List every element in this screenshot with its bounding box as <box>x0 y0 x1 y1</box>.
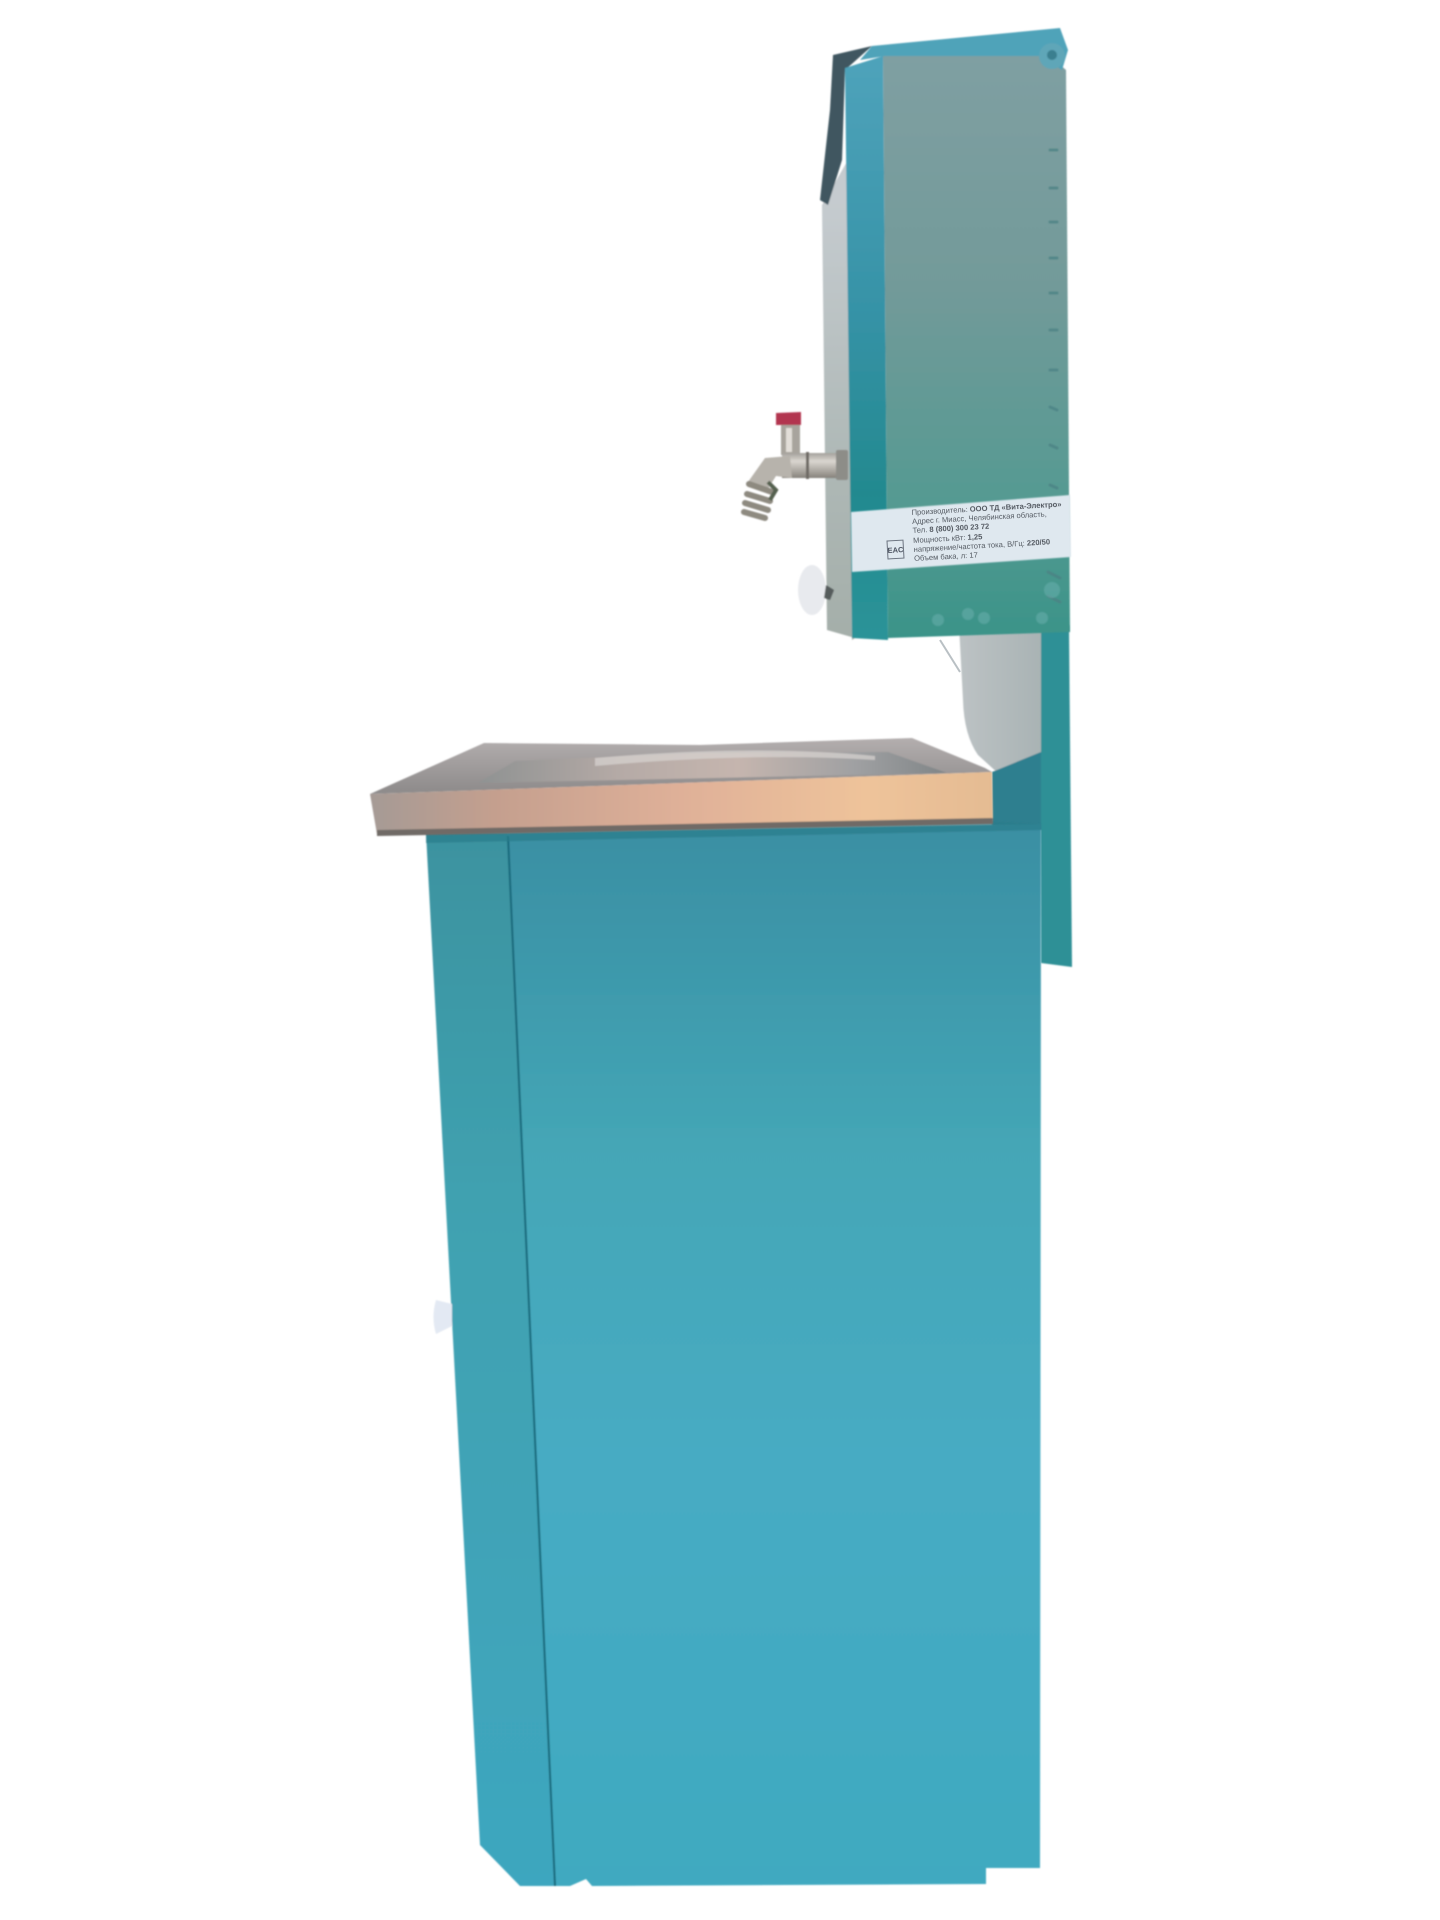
rear mounting panel <box>959 625 1072 967</box>
product label sticker <box>851 495 1071 572</box>
cabinet front door <box>508 824 1041 1886</box>
plug / thermostat cap <box>798 565 834 615</box>
sink top rim <box>370 738 992 794</box>
tap body <box>782 453 848 478</box>
stainless steel sink <box>370 738 993 836</box>
side handle knob <box>434 1300 452 1334</box>
hinge screw <box>1039 43 1065 69</box>
sink basin <box>478 752 947 783</box>
door seam <box>508 836 555 1886</box>
water heater tank <box>820 28 1070 640</box>
EAC mark: EAC <box>887 545 904 555</box>
tap stem <box>781 425 800 455</box>
water tap <box>744 412 848 518</box>
tank front panel <box>883 56 1070 638</box>
label text: Производитель: ООО ТД «Вита-Электро» <box>911 500 1062 517</box>
label text: Объем бака, л: 17 <box>914 550 978 563</box>
sink front edge <box>370 772 993 834</box>
cabinet side strip <box>426 833 555 1886</box>
tank top strip <box>860 28 1068 70</box>
tank grey side <box>822 160 855 640</box>
tap red handle <box>776 412 801 425</box>
shadow under sink <box>426 821 1041 843</box>
tank teal band <box>845 56 888 640</box>
label text: напряжение/частота тока, В/Гц: 220/50 <box>913 537 1050 554</box>
tap hose nozzle coil <box>744 484 772 518</box>
cabinet <box>426 821 1041 1886</box>
tank rivets <box>1048 150 1060 602</box>
label text: Тел. 8 (800) 300 23 72 <box>912 522 990 535</box>
tap spout <box>748 456 792 492</box>
label text: Адрес г. Миасс, Челябинская область, <box>912 509 1047 526</box>
rear column <box>959 625 1041 775</box>
EAC mark <box>887 540 904 559</box>
tank lower bumps <box>932 582 1060 626</box>
label text: Мощность кВт: 1,25 <box>913 532 983 545</box>
tank lid dark edge <box>820 46 872 205</box>
power cord <box>940 640 960 672</box>
label text <box>911 500 1064 563</box>
